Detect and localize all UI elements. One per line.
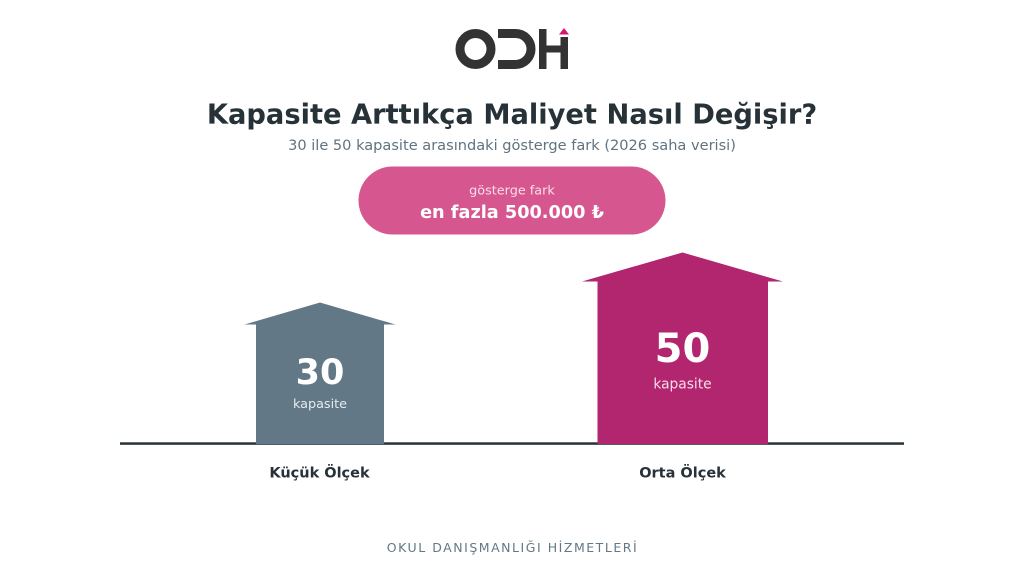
bar: Orta Ölçek, 50 kapasite: 50 xyxy=(655,326,710,372)
callout pill: gösterge fark xyxy=(358,166,666,234)
label: Orta Ölçek: Orta Ölçek xyxy=(639,464,726,482)
label: Küçük Ölçek: Küçük Ölçek xyxy=(269,464,370,482)
baseline xyxy=(120,442,904,445)
bar: Küçük Ölçek, 30 kapasite xyxy=(244,302,396,444)
bar: Orta Ölçek, 50 kapasite xyxy=(582,252,783,444)
subtitle: 30 ile 50 kapasite arasındaki gösterge fark (2026 saha verisi) xyxy=(288,137,736,154)
callout pill: gösterge fark: en fazla 500.000 ₺ xyxy=(420,203,604,223)
footer: OKUL DANIŞMANLIĞI HİZMETLERİ xyxy=(387,540,638,555)
bar: Küçük Ölçek, 30 kapasite: kapasite xyxy=(293,397,347,412)
bar: Küçük Ölçek, 30 kapasite: 30 xyxy=(296,353,344,393)
logo: ODH xyxy=(460,28,569,69)
bar: Orta Ölçek, 50 kapasite: kapasite xyxy=(653,376,712,392)
callout pill: gösterge fark: gösterge fark xyxy=(469,184,555,198)
title: Kapasite Arttıkça Maliyet Nasıl Değişir? xyxy=(207,100,817,130)
